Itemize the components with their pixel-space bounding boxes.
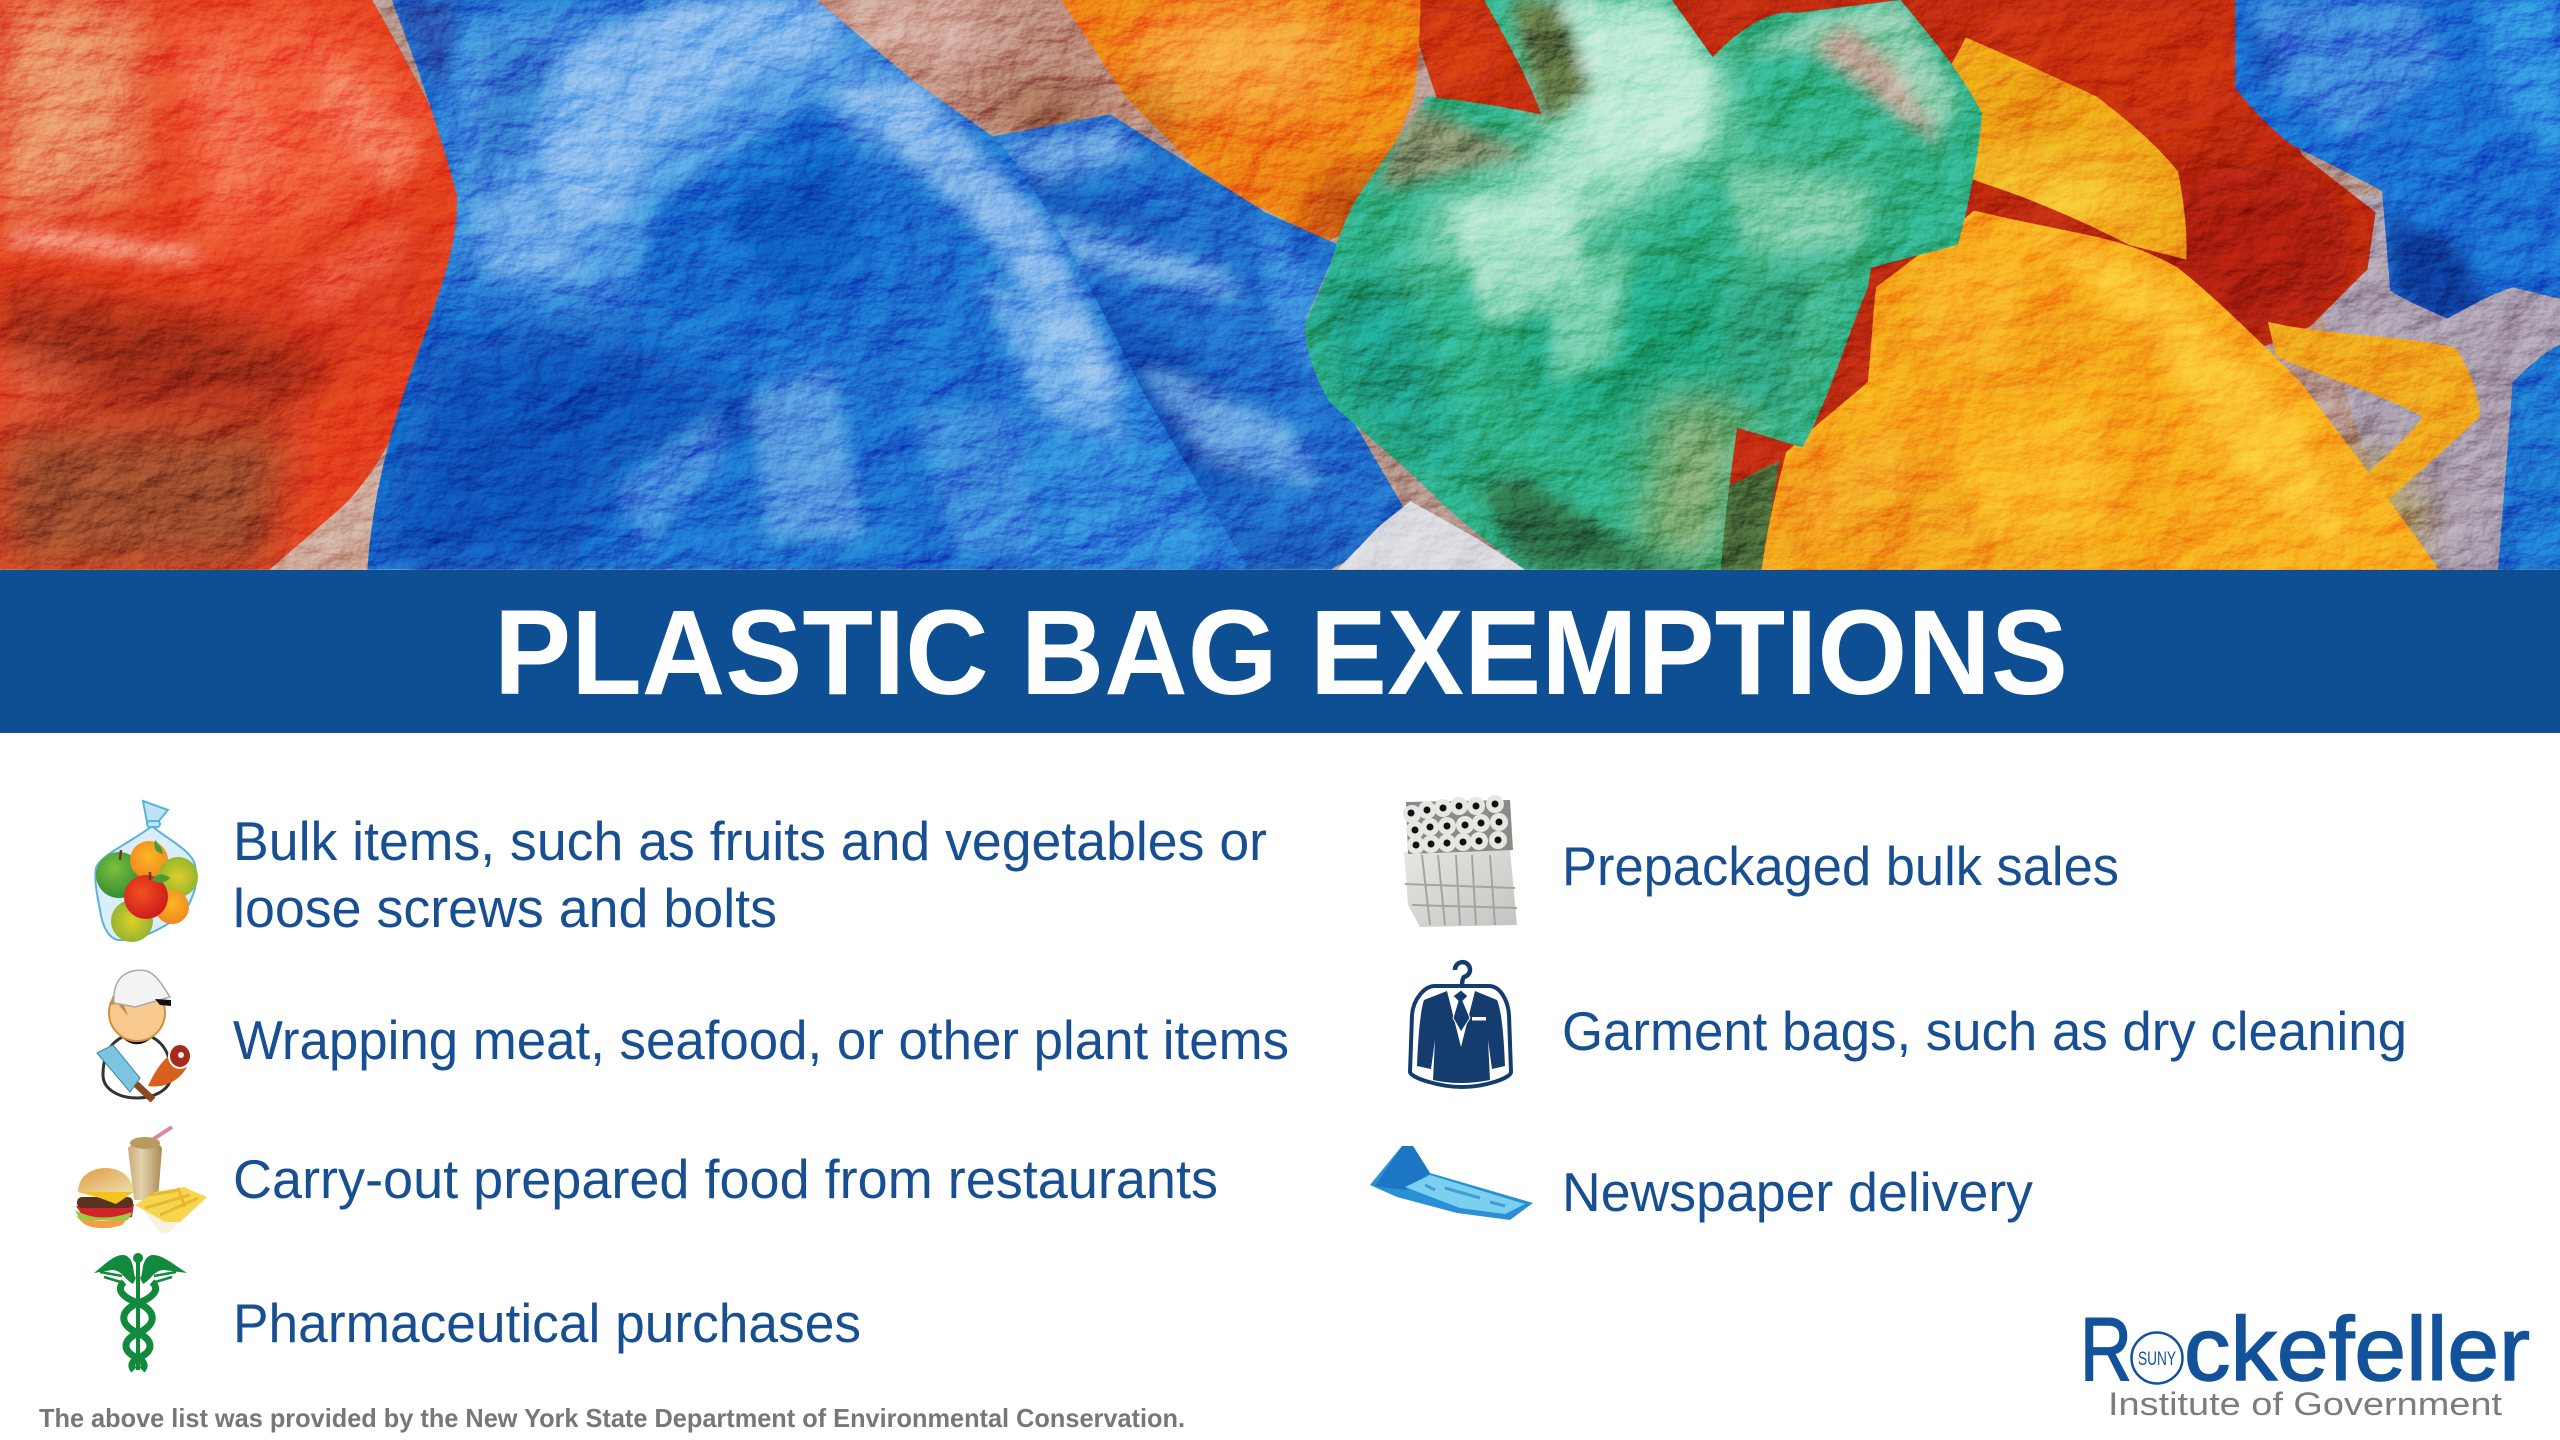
logo: Rockefeller Institute of Government: R [2080, 1300, 2132, 1400]
photo: colourful plastic bags [0, 0, 2560, 588]
logo: Rockefeller Institute of Government: ckefeller [2184, 1300, 2530, 1400]
background pale wall right [2322, 196, 2560, 570]
second blue bag [992, 114, 1404, 570]
red bag left [0, 0, 490, 570]
logo: Rockefeller Institute of Government [2080, 1300, 2530, 1422]
item: bulk items [233, 810, 1267, 939]
olive patch between bags [1721, 460, 1780, 570]
item: wrapping meat: Wrapping meat, seafood, or other plant items [233, 1009, 1289, 1071]
icon: caduceus [94, 1253, 187, 1370]
item: bulk items: loose screws and bolts [233, 877, 777, 939]
right blue bag [2220, 0, 2560, 327]
icon: butcher [97, 970, 191, 1100]
item: prepackaged: Prepackaged bulk sales [1562, 835, 2119, 897]
orange bag [1061, 0, 1420, 240]
logo: Rockefeller Institute of Government: Institute of Government [2108, 1386, 2502, 1422]
title band [0, 570, 2560, 733]
icon: garment bag [1410, 962, 1511, 1087]
item: garment bags: Garment bags, such as dry cleaning [1562, 1000, 2407, 1062]
icon: burger, shake and fries [75, 1127, 207, 1233]
icon: wrapped paper rolls [1403, 795, 1517, 927]
logo: Rockefeller Institute of Government: SUNY [2138, 1349, 2176, 1370]
yellow bag [1747, 196, 2465, 571]
item: bulk items: Bulk items, such as fruits and vegetables or [233, 810, 1267, 872]
pink-brown bag top [817, 0, 1152, 136]
white bag bottom [1337, 501, 1525, 570]
green bag [1290, 0, 1992, 570]
red bag behind [1388, 0, 2400, 570]
icon: bag of fruit [95, 801, 198, 942]
list: left column [233, 810, 1289, 1354]
source note: The above list was provided by the New York State Department of Environmental Conservation. [39, 1403, 1185, 1433]
item: newspaper: Newspaper delivery [1562, 1161, 2033, 1223]
yellow handle top [1952, 38, 2187, 260]
item: carry-out food: Carry-out prepared food from restaurants [233, 1148, 1218, 1210]
yellow handle right [2268, 322, 2480, 513]
item: pharmaceutical: Pharmaceutical purchases [233, 1292, 861, 1354]
title: PLASTIC BAG EXEMPTIONS [494, 584, 2068, 720]
list: right column [1562, 835, 2407, 1223]
main blue bag [359, 0, 1274, 570]
icon: newspaper delivery bag [1370, 1146, 1533, 1220]
